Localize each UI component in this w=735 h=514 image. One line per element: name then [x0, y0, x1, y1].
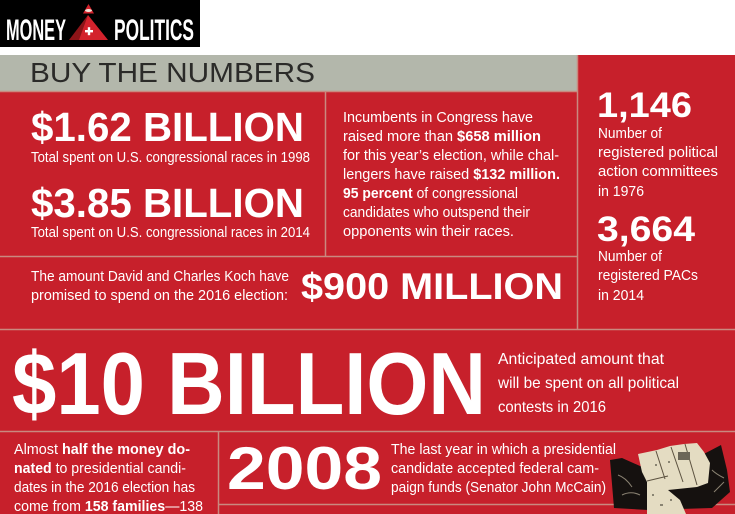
text block: 158 families: Almost half the money do- — [14, 442, 190, 458]
stat: Koch brothers: $900 MILLION — [301, 266, 563, 307]
logo: Money + Politics — [0, 0, 200, 47]
heading band: BUY THE NUMBERS — [30, 57, 315, 88]
stat: PACs 2014: Number of — [598, 249, 663, 265]
stat: PACs 1976: registered political — [598, 145, 718, 161]
text block: incumbents: 95 percent of congressional — [343, 186, 518, 202]
stat: $10 billion: contests in 2016 — [498, 399, 606, 416]
text block: incumbents: opponents win their races. — [343, 224, 514, 240]
stat: 1998 spending: $1.62 BILLION — [31, 104, 304, 150]
text block: incumbents: Incumbents in Congress have — [343, 110, 533, 126]
logo: Money + Politics: POLITICS — [114, 14, 194, 47]
stat: 2014 spending: $3.85 BILLION — [31, 180, 304, 226]
stat: 2008: paign funds (Senator John McCain) — [391, 480, 606, 496]
stat: 1998 spending: Total spent on U.S. congressional races in 1998 — [31, 150, 310, 166]
stat: PACs 2014: registered PACs — [598, 268, 698, 284]
stat: $10 billion: Anticipated amount that — [498, 351, 665, 368]
stat: 2014 spending: Total spent on U.S. congressional races in 2014 — [31, 225, 310, 241]
icon: fist clutching money — [610, 443, 730, 514]
stat: 2008: candidate accepted federal cam- — [391, 461, 599, 477]
stat: 2008: 2008 — [227, 435, 382, 502]
hand — [638, 443, 710, 514]
stat: Koch brothers: The amount David and Charles Koch have — [31, 269, 289, 285]
stat: PACs 1976: in 1976 — [598, 184, 644, 200]
text block: incumbents: for this year’s election, while chal- — [343, 148, 559, 164]
icon: pyramid — [69, 4, 108, 40]
text block: 158 families: dates in the 2016 election has — [14, 480, 195, 496]
money stack — [610, 445, 730, 510]
stat: $10 billion: will be spent on all political — [497, 375, 679, 392]
heading band — [0, 55, 577, 91]
stat: 2008: The last year in which a presidential — [391, 442, 616, 458]
text block: 158 families: nated to presidential candi- — [14, 461, 186, 477]
stat: PACs 2014 — [597, 210, 698, 304]
stat: PACs 1976: action committees — [598, 164, 718, 180]
text block: incumbents — [343, 110, 560, 240]
stat: PACs 1976 — [597, 86, 718, 200]
stat: PACs 2014: 3,664 — [597, 210, 696, 249]
stat: Koch brothers — [31, 266, 563, 307]
stat: $10 billion: $10 BILLION — [12, 334, 486, 433]
stat: Koch brothers: promised to spend on the 2016 election: — [31, 288, 288, 304]
text block: incumbents: lengers have raised $132 million. — [343, 167, 560, 183]
stat: PACs 1976: 1,146 — [597, 86, 692, 125]
text block: incumbents: candidates who outspend their — [343, 205, 530, 221]
stat: 2008 — [227, 435, 616, 502]
text block: 158 families — [14, 442, 203, 514]
stat: PACs 2014: in 2014 — [598, 288, 644, 304]
logo: Money + Politics: MONEY — [6, 14, 66, 47]
text block: incumbents: raised more than $658 million — [343, 129, 541, 145]
stat: PACs 1976: Number of — [598, 126, 663, 142]
